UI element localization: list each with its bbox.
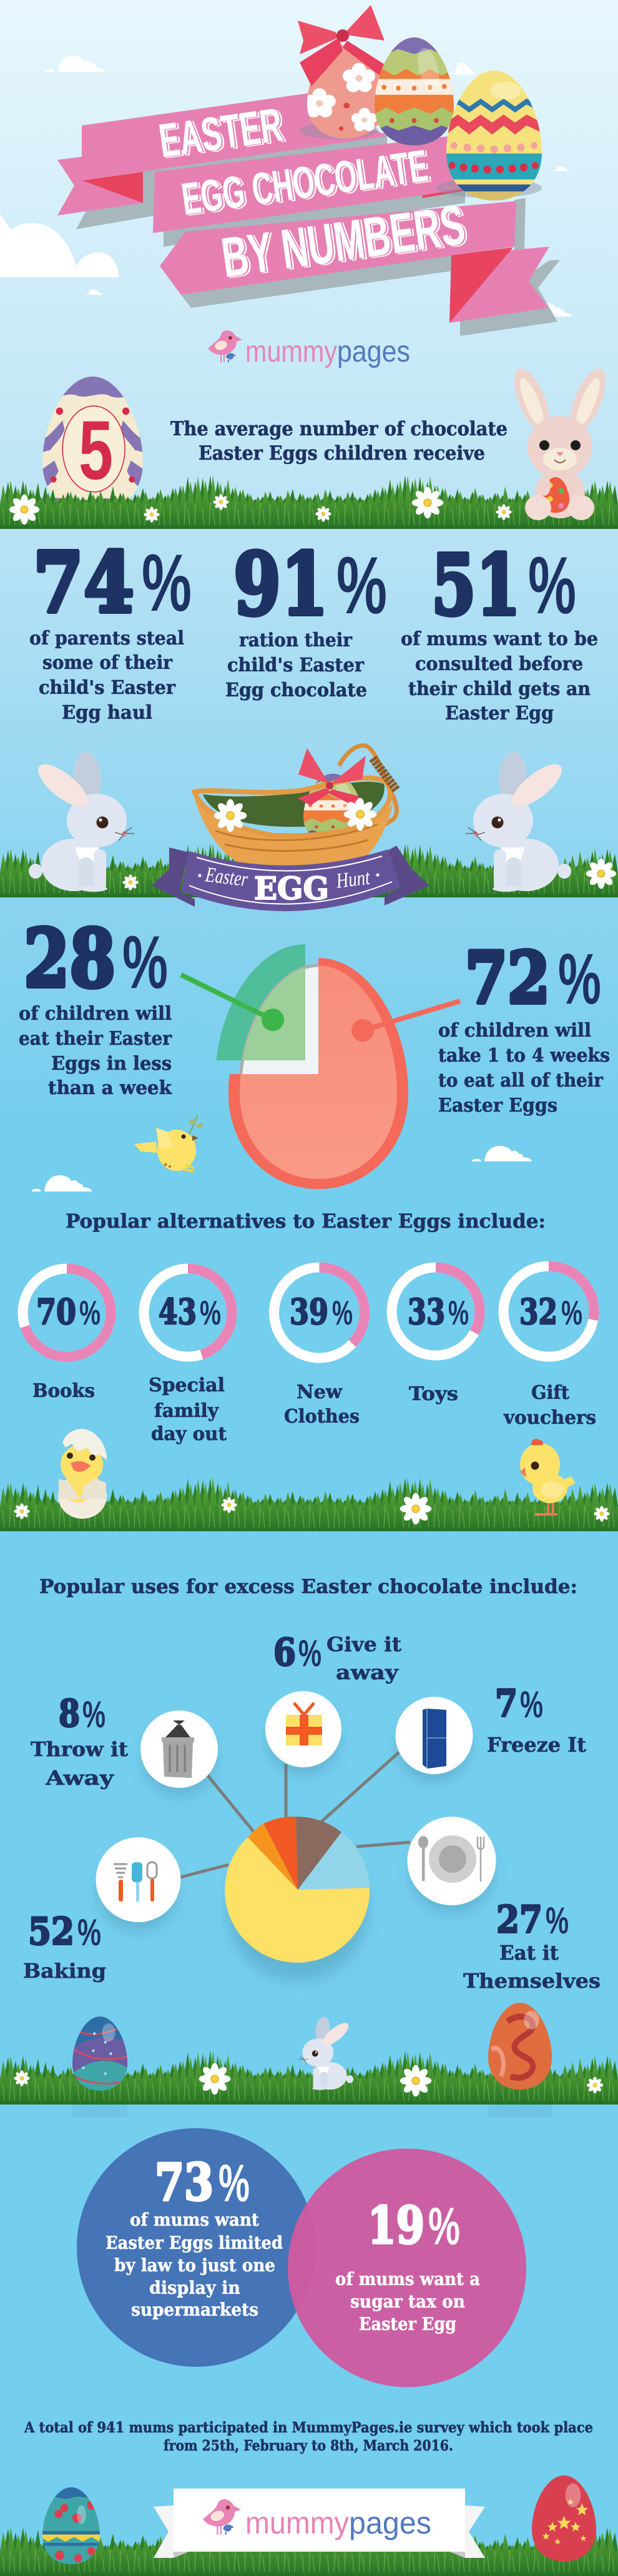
label: eat it themselves: 27	[496, 1898, 542, 1942]
logo wordmark: pages	[337, 335, 410, 368]
daisies band 4	[14, 2063, 603, 2096]
text: 73%: supermarkets	[131, 2299, 258, 2320]
text: 73%: by law to just one	[114, 2255, 275, 2276]
heading: By Numbers: BY NUMBERS	[218, 194, 469, 290]
stat: 74%: %	[142, 537, 192, 628]
icon: bunny left	[29, 751, 134, 892]
chart: egg proportion	[181, 944, 460, 1189]
title ribbon	[57, 93, 560, 336]
basket handle	[339, 746, 396, 831]
banner: mummypages footer	[154, 2489, 485, 2558]
ring: 43% family day out: family	[154, 1400, 220, 1422]
icon: yellow bird	[134, 1115, 204, 1172]
heading: Egg Chocolate: EGG CHOCOLATE	[179, 141, 431, 225]
heading: Egg Chocolate: EGG CHOCOLATE	[180, 141, 432, 225]
icon: fridge	[396, 1697, 473, 1774]
decorated eggs with bow	[298, 5, 542, 200]
stat: 74%	[29, 535, 192, 724]
footer wordmark: pages	[349, 2505, 431, 2540]
icon: ribbon bow	[298, 5, 400, 86]
text: 19%: Easter Egg	[359, 2314, 456, 2334]
label: throw it away: %	[82, 1694, 105, 1735]
icon: logo bird	[208, 330, 242, 362]
stat: 51%: their child gets an	[408, 678, 591, 700]
icon: pink egg	[307, 45, 380, 139]
ring: 33% toys	[392, 1268, 479, 1405]
heading: uses: Popular uses for excess Easter chocolate include:	[39, 1576, 577, 1598]
grass band 2	[0, 844, 618, 897]
logo wordmark	[245, 335, 410, 368]
heading: Easter	[156, 98, 288, 169]
label: give it away: 6	[273, 1631, 296, 1675]
grass band 1	[0, 475, 618, 529]
stat: 28%: eat their Easter	[19, 1028, 172, 1050]
text: 73%: display in	[149, 2277, 240, 2298]
ring: 32% gift vouchers: Gift	[531, 1382, 569, 1404]
label: eat it themselves: %	[546, 1900, 569, 1942]
daisies band 2	[122, 859, 616, 891]
banner: Easter Egg Hunt: Hunt	[335, 866, 372, 893]
daisies band 3	[14, 1493, 610, 1524]
ring: 39% new clothes: Clothes	[284, 1406, 360, 1428]
stat: 51%: consulted before	[415, 653, 583, 675]
egg slice: 72%	[228, 958, 408, 1189]
label: freeze it: %	[520, 1684, 543, 1725]
ring: 33% toys: 33	[408, 1291, 445, 1333]
stat: 72%: of children will	[438, 1020, 591, 1042]
text: 19%: 19	[368, 2196, 424, 2256]
icon: pink bunny holding egg	[514, 368, 606, 520]
stat: 72%: 72	[465, 937, 550, 1019]
icon: blue egg	[72, 2016, 127, 2091]
heading: By Numbers: BY NUMBERS	[220, 195, 471, 290]
text: 73%: Easter Eggs limited	[105, 2233, 283, 2253]
stat: 72%	[438, 937, 610, 1117]
stat: 74%: of parents steal	[29, 628, 184, 649]
ring: 32% gift vouchers: 32	[519, 1291, 557, 1333]
stat: 72%: to eat all of their	[438, 1070, 604, 1092]
ring: 70% books: %	[79, 1293, 101, 1332]
icon: plate and cutlery	[407, 1817, 496, 1905]
pointer: coral	[351, 1001, 460, 1042]
label: throw it away: Away	[45, 1766, 115, 1790]
connector lines	[180, 1752, 410, 1877]
heading: Egg Chocolate: EGG CHOCOLATE	[181, 142, 434, 225]
stat: 91%: child's Easter	[227, 654, 365, 676]
label: eat it themselves: Eat it	[499, 1941, 559, 1965]
ring: 70% books: 70	[36, 1291, 76, 1333]
ring: 39% new clothes	[274, 1268, 365, 1428]
label: baking: 52	[28, 1910, 74, 1953]
ring: 43% family day out: 43	[159, 1291, 197, 1333]
banner: Easter Egg Hunt	[152, 846, 429, 911]
stat: 51%: 51	[431, 537, 521, 634]
panel: parents stats	[29, 535, 598, 724]
label: freeze it: 7	[495, 1682, 517, 1726]
stat: 91%: ration their	[239, 629, 353, 651]
icon: standing chick	[520, 1439, 576, 1514]
icon: orange egg	[488, 2003, 552, 2090]
icon: footer logo bird	[203, 2499, 241, 2535]
label: freeze it	[487, 1682, 586, 1757]
stat: 74%: 74	[33, 535, 134, 632]
stat: 28%: than a week	[48, 1077, 172, 1099]
stat: 51%	[401, 537, 598, 724]
stat: 28%: %	[122, 920, 168, 1004]
pie chart	[225, 1817, 370, 1963]
label: freeze it: Freeze It	[487, 1733, 586, 1757]
stat: 74%: child's Easter	[39, 677, 176, 699]
text: 73%: 73	[155, 2153, 213, 2213]
stat: 28%: Eggs in less	[51, 1053, 172, 1075]
icon: striped egg	[375, 37, 454, 146]
label: throw it away: Throw it	[31, 1737, 128, 1761]
pointer: green	[181, 975, 284, 1031]
egg with number 5	[42, 377, 143, 513]
footnote: survey: from 25th, February to 8th, March 2016.	[164, 2437, 453, 2454]
stat: 72%: take 1 to 4 weeks	[438, 1045, 610, 1067]
ring: 43% family day out: Special	[149, 1374, 225, 1396]
banner: Easter Egg Hunt: Easter	[204, 863, 250, 891]
icon: bunny right	[466, 751, 571, 892]
text: 19%: of mums want a	[335, 2269, 480, 2289]
stat: 91%	[225, 535, 387, 701]
label: eat it themselves: Themselves	[463, 1969, 601, 1993]
logo wordmark: mummy	[245, 335, 337, 368]
stat: 28%	[19, 912, 172, 1099]
icon: bin	[140, 1710, 218, 1788]
label: baking	[23, 1910, 106, 1983]
text: 73%	[105, 2153, 283, 2320]
banner: Easter Egg Hunt: EGG	[254, 870, 329, 907]
stat: 28%: of children will	[19, 1003, 172, 1025]
text: average number of eggs: The average number of chocolate	[170, 418, 508, 440]
ring: 39% new clothes: %	[332, 1293, 353, 1332]
icon: easter basket	[195, 746, 396, 867]
egg shadows below grass	[72, 2105, 552, 2117]
heading: Egg Chocolate	[179, 141, 434, 226]
label: give it away: %	[298, 1632, 321, 1674]
icon: hatching chick	[58, 1429, 107, 1519]
label: give it away: away	[336, 1661, 400, 1684]
text: 19%: %	[428, 2197, 460, 2256]
footer wordmark: mummy	[245, 2505, 349, 2540]
text: 73%: of mums want	[130, 2209, 259, 2230]
text: average number of eggs	[170, 418, 508, 465]
heading: alternatives: Popular alternatives to Easter Eggs include:	[66, 1210, 546, 1233]
ring: 70% books	[22, 1269, 111, 1402]
heading: Easter: EASTER	[159, 99, 288, 169]
icon: egg in basket	[303, 774, 363, 843]
icon: yellow egg	[446, 71, 542, 200]
heading: Easter: EASTER	[156, 98, 285, 168]
stat: 51%: of mums want to be	[401, 628, 598, 650]
text: 19%	[335, 2196, 480, 2334]
icon: small bow	[298, 748, 366, 806]
clouds: header	[0, 56, 572, 317]
text: 19%: sugar tax on	[350, 2291, 465, 2312]
label: baking: %	[77, 1912, 101, 1953]
heading: Easter: EASTER	[157, 99, 287, 169]
egg slice: 28%	[216, 944, 318, 1074]
panel: alternatives rings	[22, 1266, 596, 1445]
grass band 4	[0, 2051, 618, 2105]
circle: 73% of mums	[77, 2128, 315, 2367]
heading: By Numbers: BY NUMBERS	[219, 194, 470, 290]
stat: 74%: some of their	[42, 652, 173, 674]
stat: 51%: %	[528, 540, 576, 631]
ring: 39% new clothes: 39	[290, 1291, 328, 1333]
ring: 70% books: Books	[32, 1380, 95, 1402]
label: give it away	[273, 1631, 401, 1684]
ring: 32% gift vouchers: vouchers	[503, 1407, 596, 1429]
ring: 43% family day out	[144, 1269, 232, 1445]
ring: 33% toys: Toys	[409, 1383, 458, 1405]
stat: 28%: 28	[24, 912, 115, 1005]
grass band 5	[0, 2522, 618, 2576]
icon: teal egg	[42, 2487, 100, 2564]
ring: 39% new clothes: New	[297, 1381, 343, 1403]
stat: 91%: %	[336, 540, 387, 631]
heading: By Numbers	[218, 194, 471, 291]
icon: grey bunny small	[298, 2016, 353, 2090]
circle: 19% of mums	[288, 2148, 526, 2387]
ring: 33% toys: %	[448, 1293, 469, 1332]
icon: red star egg	[532, 2475, 596, 2562]
label: eat it themselves	[463, 1898, 601, 1993]
stat: 51%: Easter Egg	[445, 703, 554, 724]
label: baking: Baking	[23, 1959, 106, 1983]
icon: baking tools	[96, 1837, 181, 1922]
clouds: mid	[32, 1146, 532, 1192]
number: 5: 5	[79, 404, 113, 497]
text: average number of eggs: Easter Eggs children receive	[199, 442, 485, 465]
footnote: survey	[24, 2419, 593, 2454]
label: throw it away	[31, 1692, 128, 1790]
ring: 43% family day out: day out	[151, 1423, 227, 1445]
daisies band 1	[9, 487, 512, 525]
stat: 74%: Egg haul	[62, 702, 152, 724]
ring: 32% gift vouchers	[503, 1266, 596, 1429]
stat: 91%: Egg chocolate	[225, 679, 367, 701]
grass band 3	[0, 1478, 618, 1531]
stat: 91%: 91	[233, 535, 328, 634]
logo: mummypages	[208, 330, 410, 368]
footer wordmark	[245, 2505, 431, 2540]
label: give it away: Give it	[326, 1632, 401, 1656]
stat: 72%: Easter Eggs	[438, 1095, 557, 1117]
label: throw it away: 8	[59, 1692, 80, 1736]
chart: uses pie with icons	[23, 1631, 601, 1993]
ring: 32% gift vouchers: %	[561, 1293, 582, 1332]
ring: 43% family day out: %	[200, 1293, 221, 1332]
icon: gift	[265, 1691, 341, 1767]
text: 73%: %	[218, 2154, 250, 2213]
